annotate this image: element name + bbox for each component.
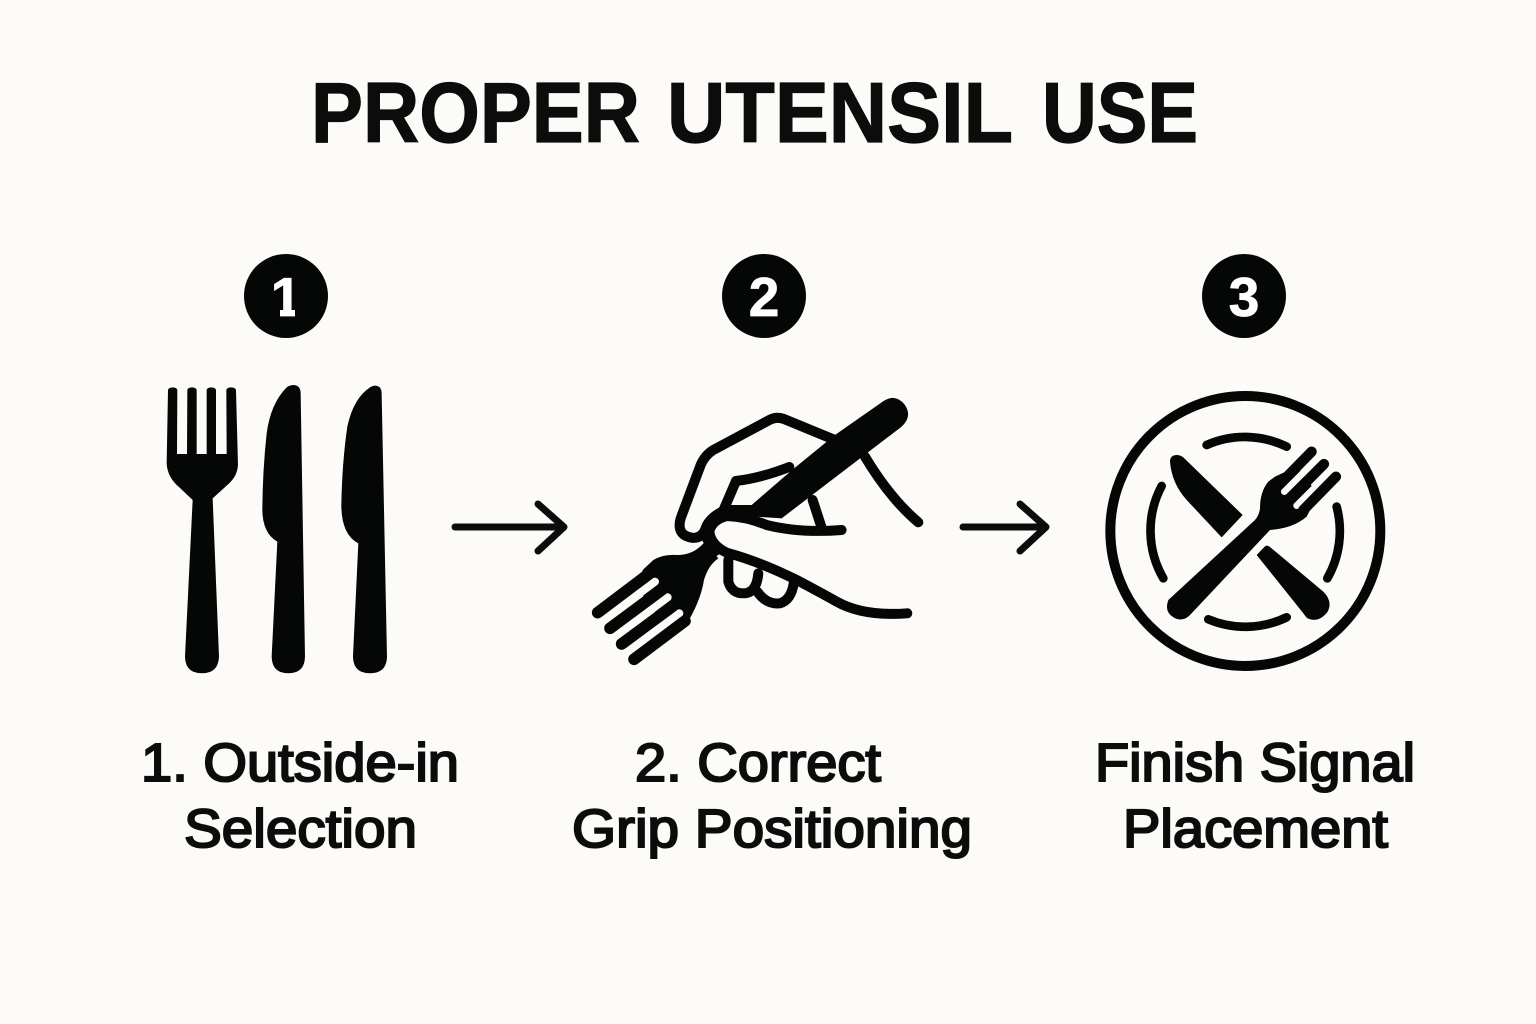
icon: hand gripping fork [598, 398, 918, 659]
icon: fork and two knives [167, 385, 387, 673]
fork tines [598, 574, 685, 659]
fork head [635, 542, 718, 632]
thumb joint [707, 535, 718, 555]
step 3 label: Finish Signal [1095, 733, 1415, 793]
thumb and lower hand line [709, 516, 907, 614]
fork tines [1278, 452, 1336, 510]
back of hand outline [680, 418, 835, 538]
step 1 label [141, 733, 459, 859]
step 3 label [1095, 733, 1415, 859]
knife handle [1257, 546, 1330, 620]
icon: first knife [262, 385, 305, 673]
palm strut [813, 500, 821, 527]
inner plate arcs [1151, 437, 1340, 627]
step 1 number badge: 1 [271, 266, 301, 328]
step 1 number badge [244, 254, 328, 338]
fork body [1167, 467, 1318, 620]
arrow: step 2 to step 3 [963, 504, 1046, 551]
fork slots [1284, 466, 1322, 506]
icon: second knife [341, 386, 387, 673]
knife blade [1170, 455, 1243, 537]
title: USE [1042, 66, 1198, 161]
arrow: step 1 to step 2 [455, 504, 564, 551]
step 3 label: Placement [1123, 799, 1388, 859]
title: UTENSIL [667, 66, 1013, 161]
step 1 label: 1. Outside-in [141, 733, 459, 793]
step 2 label: Grip Positioning [572, 799, 972, 859]
step 2 number badge: 2 [749, 266, 779, 328]
icon: plate with crossed knife and fork [1110, 396, 1380, 666]
pen-like handle [727, 398, 908, 518]
curled fingers [728, 560, 794, 603]
icon: fork [167, 387, 238, 673]
plate rim [1110, 396, 1380, 666]
wrist line [865, 457, 918, 522]
title [311, 66, 1198, 161]
step 3 number badge: 3 [1229, 266, 1259, 328]
step 3 number badge [1202, 254, 1286, 338]
step 1 label: Selection [184, 799, 417, 859]
index finger outline [724, 467, 789, 509]
fork slots [623, 582, 679, 637]
step 2 number badge [722, 254, 806, 338]
step 2 label [572, 733, 972, 859]
step 2 label: 2. Correct [635, 733, 881, 793]
title: PROPER [311, 66, 640, 161]
